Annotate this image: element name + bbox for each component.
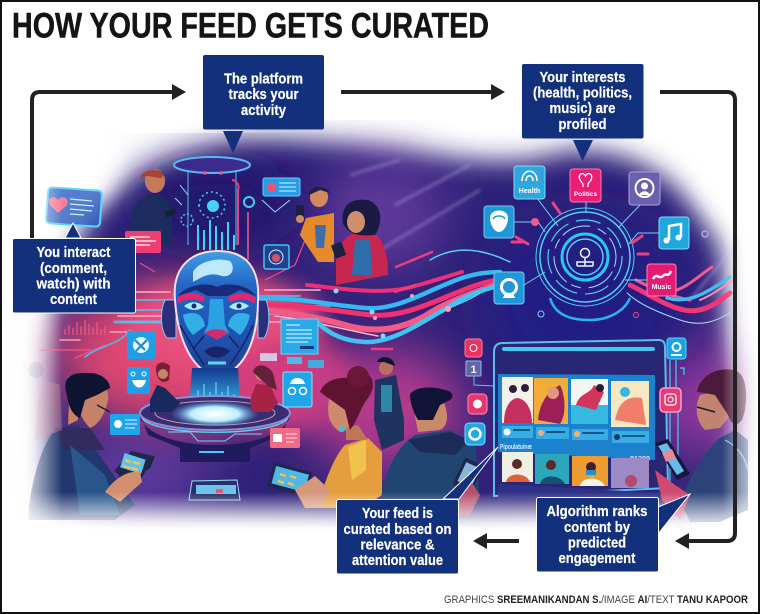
callout: you interact with content: watch) with: [36, 276, 111, 292]
callout: your feed is curated: [336, 447, 498, 574]
pink tile: [270, 428, 300, 448]
section labels: Pipoulatuinæ: [500, 444, 532, 451]
icon: mask face: [484, 206, 514, 238]
callout: you interact with content: You interact: [36, 244, 110, 261]
document card: [281, 319, 318, 354]
lower pink band: [260, 282, 505, 330]
callout: your interests are profiled: music) are: [550, 100, 616, 117]
icon: health: [514, 166, 545, 199]
bottom nav: [498, 484, 660, 500]
arrow: interact to platform: [32, 84, 186, 238]
callout: algorithm ranks content: predicted: [568, 534, 626, 552]
floating tiles left of head: [110, 331, 155, 435]
icons left of screen: [465, 339, 494, 445]
icon: pink camera: [465, 339, 482, 357]
illustration: AI-driven feed scene: [28, 120, 756, 527]
person: woman with bun in yellow jacket: [268, 366, 382, 508]
accent dashes: [512, 203, 648, 254]
icon: numbered tile: [466, 361, 481, 376]
eyes: [184, 302, 249, 310]
card: heart comment: [46, 187, 102, 227]
curved lower arcs: [550, 298, 630, 320]
callout: your interests are profiled: profiled: [558, 116, 606, 133]
right side stream: [630, 285, 730, 311]
callout: the platform tracks your activity: activity: [241, 102, 287, 119]
background left figure: [28, 362, 62, 440]
arrow: interests to algorithm: [660, 92, 735, 549]
upper cyan band: [260, 272, 500, 308]
hub rings: [536, 208, 634, 306]
lower cyan band: [317, 285, 502, 342]
callout: algorithm ranks content: Algorithm ranks: [546, 503, 648, 520]
callout: you interact with content: [12, 223, 136, 313]
person: back view with tablet, bottom left: [28, 373, 155, 520]
callout: the platform tracks your activity: The platform: [224, 70, 303, 88]
person: woman in red jacket: [331, 200, 388, 285]
light rays: [350, 160, 740, 300]
feed cards: [502, 377, 533, 423]
big feed screen: [494, 340, 668, 500]
callout: your feed is curated: curated based on: [344, 521, 452, 538]
nose: [204, 299, 229, 339]
icon: webcam: [667, 338, 686, 359]
callout: your interests are profiled: (health, politics,: [533, 84, 632, 102]
arrow: algorithm to feed: [473, 533, 519, 549]
icon: music: [647, 264, 676, 296]
callout: you interact with content: content: [50, 291, 97, 308]
title: HOW YOUR FEED GETS CURATED: [12, 6, 489, 46]
icon: chat tile: [110, 414, 140, 435]
small table tablet: [189, 480, 240, 500]
callout: algorithm ranks content: [536, 494, 690, 572]
callout: algorithm ranks content: content by: [564, 519, 631, 536]
floating tiles right of head: [260, 319, 324, 448]
person: standing figure near centre: [374, 357, 404, 450]
face: [175, 251, 258, 375]
callout: you interact with content: (comment,: [40, 260, 107, 277]
second row cards: [502, 452, 533, 482]
face contour lines: [180, 325, 253, 365]
icons left of screen: 1: [470, 364, 477, 376]
bar chart glyph: [65, 320, 105, 335]
icon: health: Health: [519, 188, 540, 195]
data streams: [40, 250, 732, 358]
icon: politics: Politics: [574, 191, 597, 198]
hub of interests: [484, 166, 708, 320]
forehead gloss: [193, 260, 233, 282]
AI neck: [189, 368, 241, 412]
mouth: [204, 346, 230, 358]
callout: your feed is curated: relevance &: [360, 536, 435, 554]
icon: face tile: [127, 367, 150, 394]
content panel: [498, 374, 655, 460]
person: man with phone at right: [655, 369, 748, 522]
icons right of screen: [660, 338, 686, 490]
circuit tower behind head: [140, 157, 305, 280]
icon: globe tile: [127, 331, 155, 359]
hub spokes: [514, 198, 659, 285]
caption bars: [502, 426, 533, 438]
small chips: [260, 353, 277, 361]
icon: music: Music: [652, 284, 672, 291]
callout: your feed is curated: Your feed is: [362, 505, 433, 522]
stream nodes: [334, 288, 451, 338]
cheeks: [183, 313, 250, 335]
icon: instagram: [660, 388, 681, 412]
callout: the platform tracks your activity: [203, 55, 324, 153]
seated figures by the platform: [150, 363, 278, 412]
icon: pink glyph: [468, 394, 487, 414]
headphones: [161, 300, 269, 338]
callout: algorithm ranks content: engagement: [558, 550, 636, 567]
credit line: GRAPHICS SREEMANIKANDAN S./IMAGE AI/TEXT TANU KAPOOR: [444, 594, 748, 606]
icon: podcast: [629, 172, 660, 205]
hologram platform: [140, 396, 290, 462]
person: top-left with phone: [129, 169, 177, 245]
horizontal light bars beside head: [112, 290, 330, 322]
lower left streams: [40, 345, 105, 358]
callout: your interests are profiled: [522, 64, 644, 161]
people tile: [283, 372, 312, 407]
person: dark haired man in blue jacket: [380, 388, 483, 515]
big feed screen: 81300: [630, 456, 650, 463]
illustration backdrop: [0, 105, 760, 528]
top bar: [502, 347, 655, 351]
thin stream accents: [440, 293, 480, 312]
icon: headset profile: [494, 272, 524, 304]
card: blue message top: [263, 178, 300, 196]
card: pink message: [125, 231, 161, 253]
callout: your feed is curated: attention value: [352, 552, 443, 569]
icon: round tile: [264, 245, 289, 269]
icon: music note: [659, 217, 689, 249]
top pink band: [307, 272, 462, 291]
brows: [177, 293, 205, 304]
icon: politics: [570, 169, 601, 202]
callout: the platform tracks your activity: tracks your: [228, 86, 299, 103]
AI head with headphones: [161, 251, 269, 375]
arrow: platform to interests: [341, 84, 505, 100]
person: phone holder in orange jacket: [296, 187, 334, 262]
middle pink band: [265, 278, 510, 315]
callout: your interests are profiled: Your interests: [540, 69, 626, 86]
icon: blue ring: [465, 423, 485, 445]
